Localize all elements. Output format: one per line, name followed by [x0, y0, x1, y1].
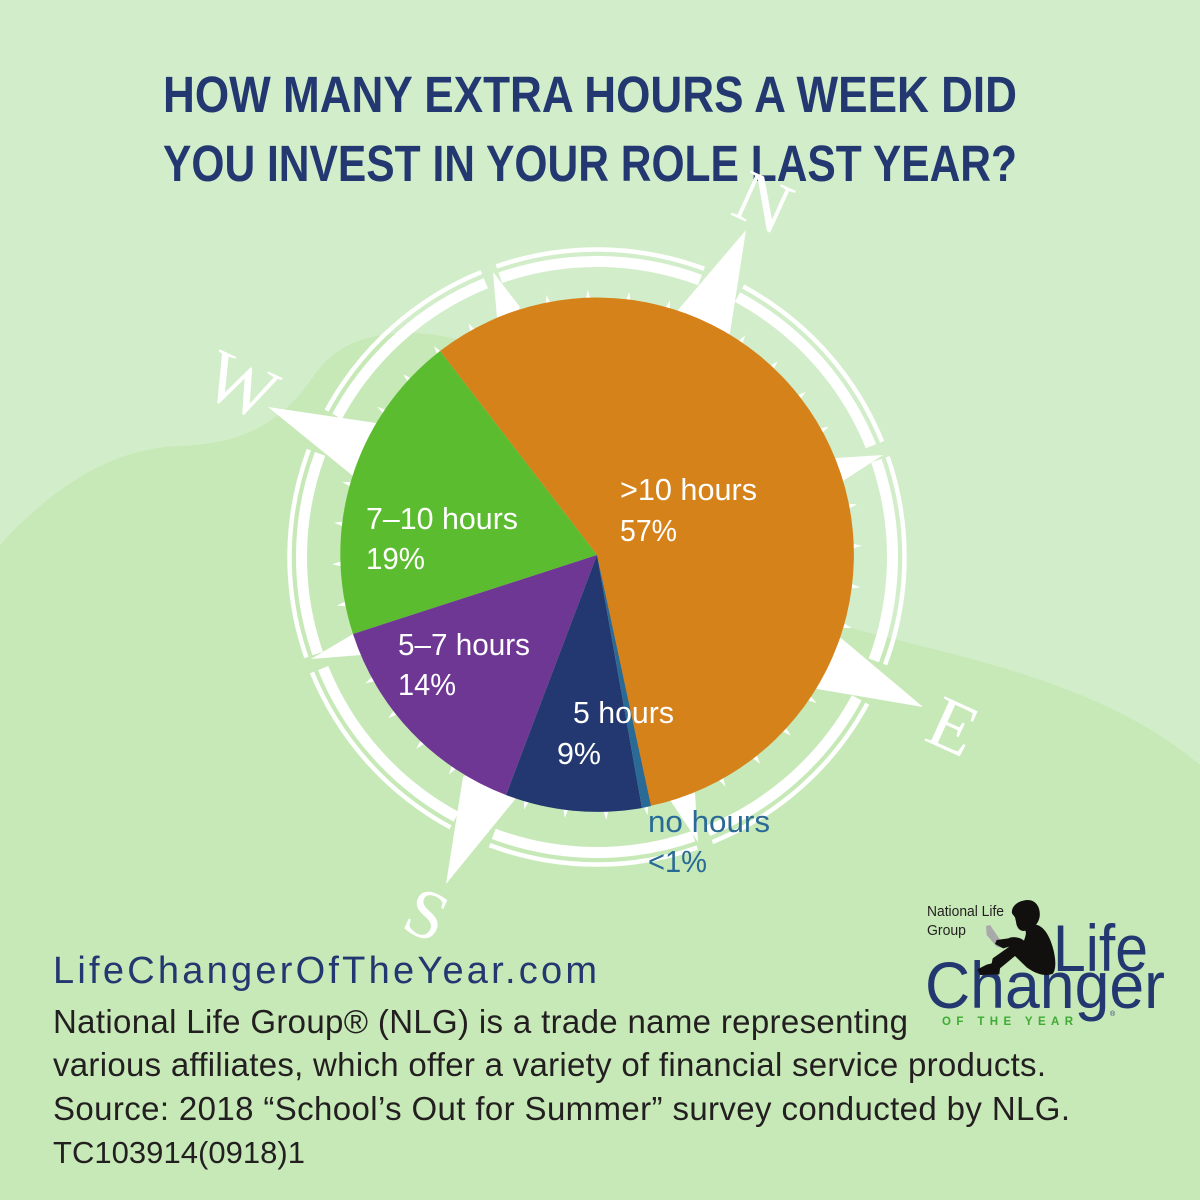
label: no hours: <1%: [648, 844, 707, 879]
label: more than 10 hours: >10 hours: [620, 472, 757, 507]
logo: National Life Group text: [927, 903, 1004, 939]
compass tick marks: [332, 290, 862, 820]
label: 5-7 hours: 5–7 hours: [398, 627, 530, 662]
disclosure text: National Life Group® (NLG) is a trade name representing: [53, 1003, 908, 1040]
title: [163, 66, 1017, 192]
label: no hours: [648, 804, 770, 879]
label: 7-10 hours: [366, 501, 518, 576]
disclosure text: TC103914(0918)1: [53, 1135, 305, 1170]
label: more than 10 hours: [620, 472, 757, 548]
compass rose: [180, 140, 1014, 974]
compass letter E: E: [915, 680, 991, 774]
compass letter W: W: [192, 334, 290, 438]
label: 7-10 hours: 19%: [366, 541, 425, 576]
label: 5 hours: 5 hours: [573, 695, 674, 730]
title: HOW MANY EXTRA HOURS A WEEK DID: [163, 66, 1017, 123]
label: no hours: no hours: [648, 804, 770, 839]
logo: Life wordmark: Life: [1053, 911, 1148, 985]
background: darker green hill: [0, 333, 1200, 1200]
logo: of the year tagline: OF THE YEAR: [942, 1016, 1074, 1028]
slice: 5 hours: [506, 555, 642, 812]
compass letter S: S: [393, 872, 460, 958]
slice: no hours: [597, 555, 651, 808]
label: 7-10 hours: 7–10 hours: [366, 501, 518, 536]
compass outer thin ring: [180, 140, 1014, 974]
label: 5-7 hours: [398, 627, 530, 702]
label: more than 10 hours: 57%: [620, 513, 677, 548]
slice: more than 10 hours: [440, 298, 854, 806]
label: 5 hours: [557, 695, 674, 771]
logo: National Life Group text: Group: [927, 922, 966, 939]
disclosure text: various affiliates, which offer a variety of financial service products.: [53, 1046, 1046, 1083]
compass inner thick ring: [196, 156, 998, 958]
logo: Changer wordmark: Changer: [925, 948, 1165, 1022]
compass main points N E S W: [268, 230, 923, 884]
logo: reading child silhouette: [977, 900, 1055, 975]
disclosure text: Source: 2018 “School’s Out for Summer” survey conducted by NLG.: [53, 1090, 1070, 1127]
slice: 5-7 hours: [353, 555, 597, 795]
slice: 7-10 hours: [340, 351, 597, 634]
compass letter N: N: [722, 155, 804, 251]
disclosure text: [53, 1003, 1070, 1170]
logo: Life Changer of the Year: [925, 900, 1165, 1028]
website url: LifeChangerOfTheYear.com: [53, 950, 597, 992]
title: YOU INVEST IN YOUR ROLE LAST YEAR?: [163, 135, 1017, 192]
logo: registered mark: ®: [1110, 1010, 1116, 1018]
logo: National Life Group text: National Life: [927, 903, 1004, 920]
label: 5 hours: 9%: [557, 736, 601, 771]
compass minor points: [311, 272, 883, 842]
pie chart: [340, 298, 854, 812]
label: 5-7 hours: 14%: [398, 667, 456, 702]
